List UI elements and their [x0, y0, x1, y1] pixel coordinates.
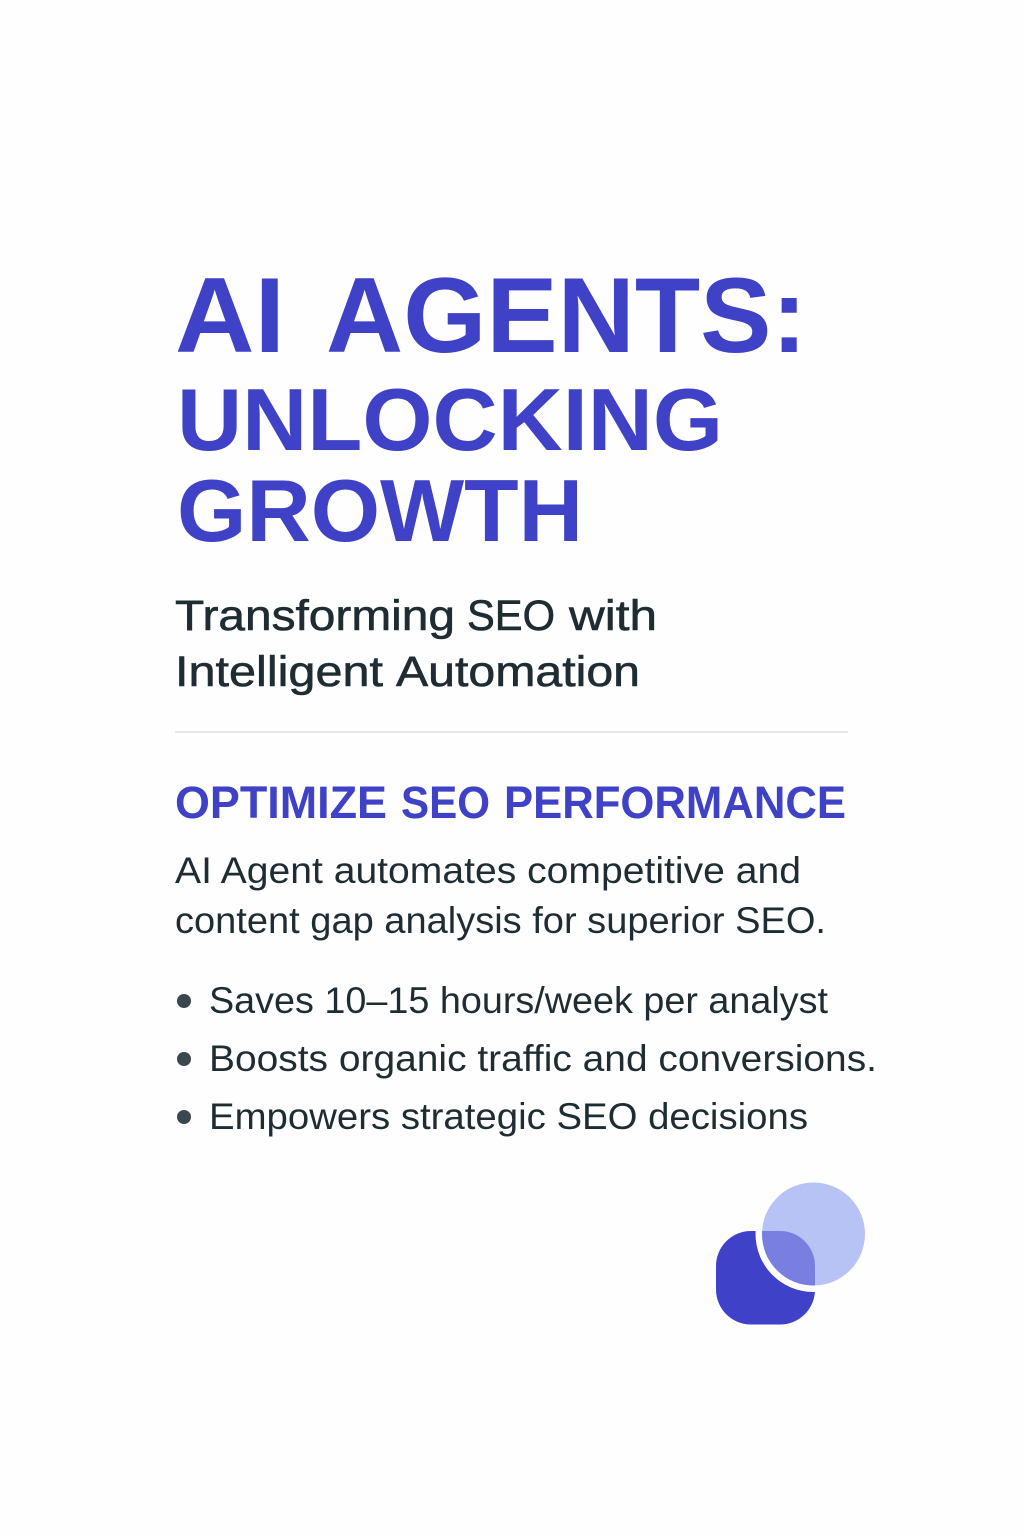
title line 1: AGENTS: [326, 255, 807, 375]
icon: rounded square [716, 1231, 815, 1324]
subtitle [175, 592, 657, 696]
subtitle line 2: Intelligent [175, 648, 383, 696]
subtitle line 1: Transforming [175, 592, 455, 640]
section heading: SEO [401, 777, 490, 828]
icon: overlap [762, 1231, 815, 1286]
subtitle line 2 [175, 648, 640, 696]
title [175, 255, 807, 560]
icon: light circle [762, 1182, 865, 1286]
bullet list [177, 980, 877, 1137]
bullet 2: Boosts organic traffic and conversions. [209, 1038, 877, 1079]
description line 2: content gap analysis for superior SEO. [175, 900, 826, 941]
subtitle line 1: SEO [467, 592, 555, 640]
title line 1: AI [175, 255, 285, 375]
description line 1: AI Agent automates competitive and [175, 850, 801, 891]
section heading [175, 777, 846, 828]
subtitle line 1 [175, 592, 657, 640]
bullet 1: Saves 10–15 hours/week per analyst [209, 980, 829, 1021]
section heading: PERFORMANCE [504, 777, 846, 828]
subtitle line 1: with [568, 592, 657, 640]
subtitle line 2: Automation [396, 648, 640, 696]
title line 3: GROWTH [177, 461, 583, 560]
description text [175, 850, 826, 941]
title line 2: UNLOCKING [177, 370, 723, 469]
bullet 3: Empowers strategic SEO decisions [209, 1096, 808, 1137]
section heading: OPTIMIZE [175, 777, 387, 828]
icon: overlapping rounded square and circle logo [716, 1182, 865, 1324]
